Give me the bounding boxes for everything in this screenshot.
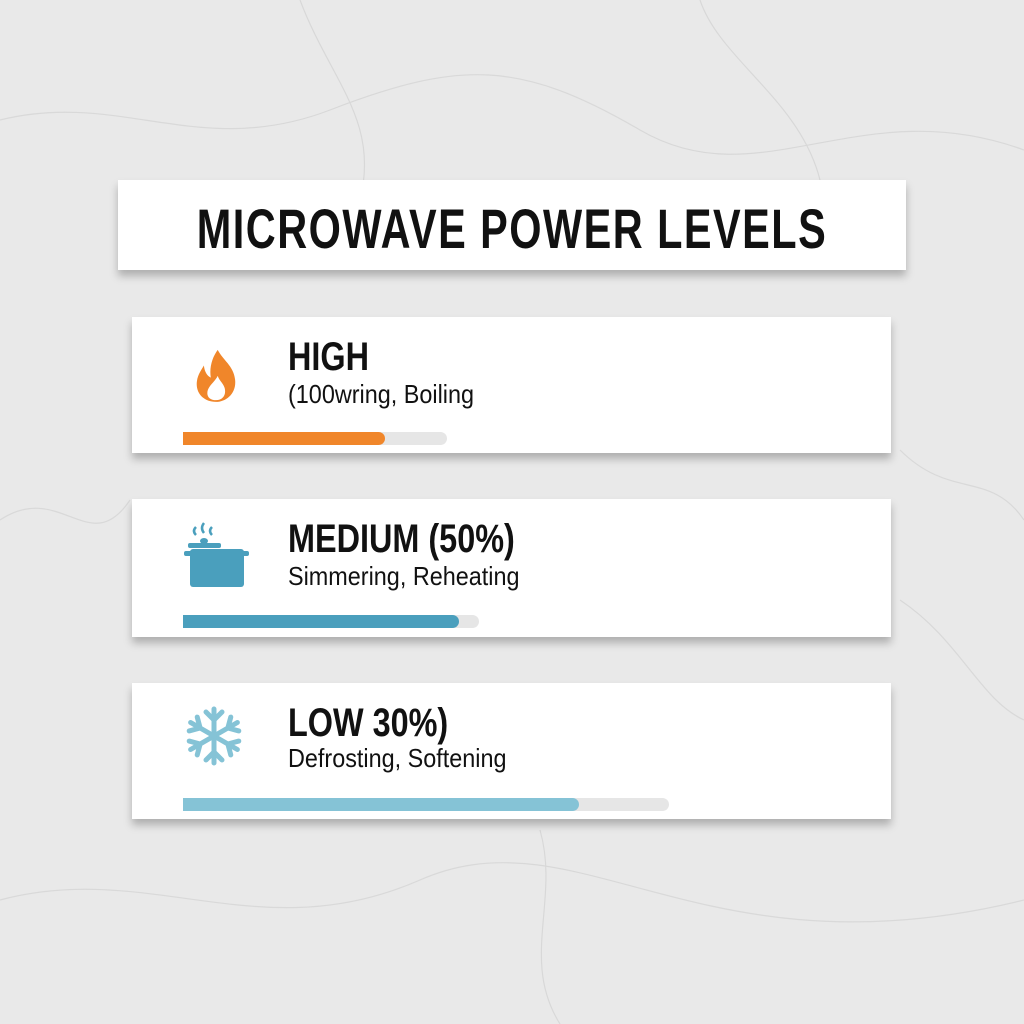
heading high: HIGH	[288, 335, 369, 379]
panel: low	[132, 683, 891, 819]
icon: pot	[184, 522, 249, 587]
panel: medium	[132, 499, 891, 637]
subtitle high: (100wring, Boiling	[288, 379, 474, 409]
subtitle medium: Simmering, Reheating	[288, 561, 520, 591]
icon: snowflake	[186, 706, 242, 766]
icon: flame	[196, 350, 236, 402]
heading medium: MEDIUM (50%)	[288, 517, 515, 561]
subtitle low: Defrosting, Softening	[288, 743, 507, 773]
title	[118, 180, 906, 270]
bar low	[183, 798, 669, 811]
bar high	[183, 432, 447, 445]
bar medium	[183, 615, 479, 628]
heading low: LOW 30%)	[288, 701, 448, 745]
title: MICROWAVE POWER LEVELS	[197, 197, 827, 260]
panel: high	[132, 317, 891, 453]
